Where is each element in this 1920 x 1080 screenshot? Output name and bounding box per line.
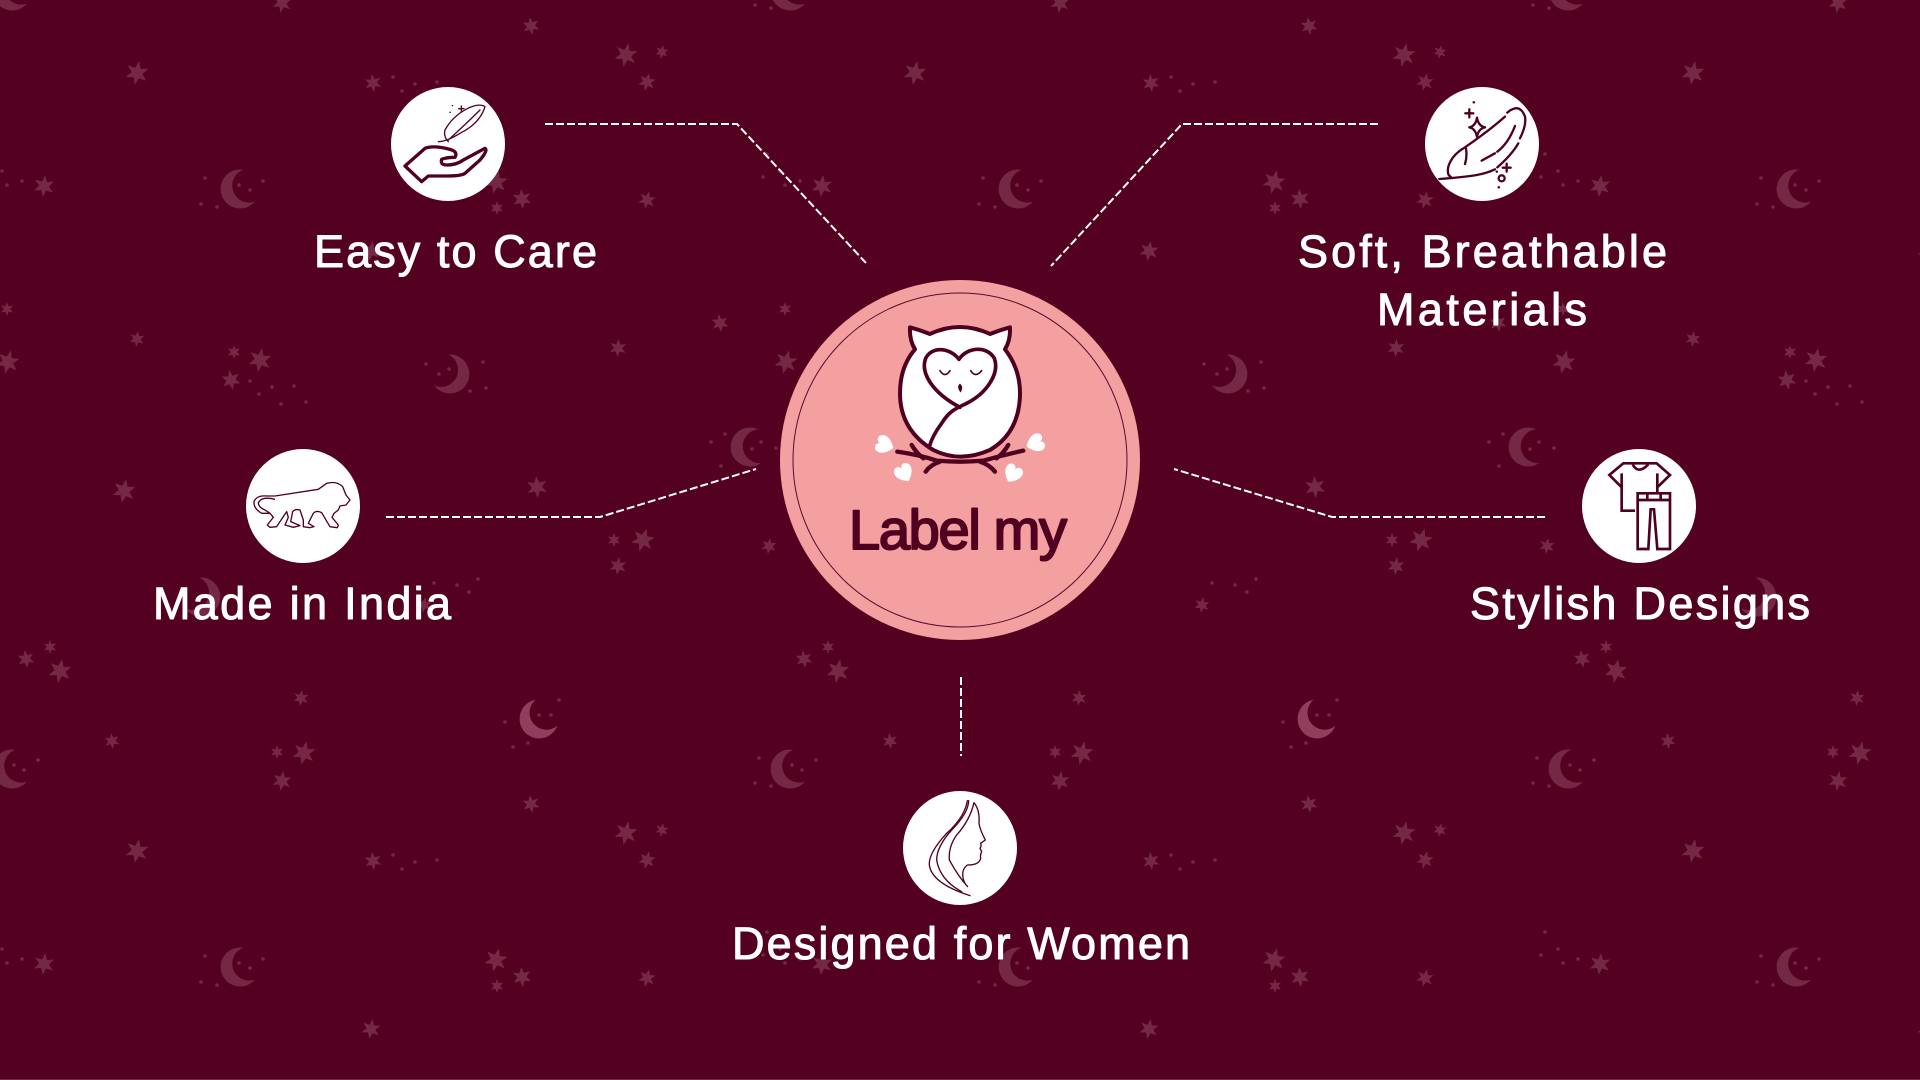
label: Easy to Care [314,226,597,277]
feature: soft breathable materials [1298,87,1667,335]
connector: middle right [1174,469,1545,517]
connector: bottom [960,677,962,756]
owl logo mark [873,327,1046,486]
brand name: Label my [849,498,1067,561]
icon: feather with sparkles [1439,102,1525,187]
label: Made in India [153,578,452,629]
icon: woman profile [929,801,985,896]
connector: top left [545,124,866,263]
label line 2: Materials [1377,284,1587,335]
central logo badge [780,280,1140,640]
feature: made in india [153,449,452,629]
icon: shirt and trousers [1609,463,1670,549]
connector: middle left [386,469,756,517]
feature: easy to care [314,87,597,277]
label: Soft, Breathable [1298,226,1667,277]
icon: hand holding feather [405,105,486,182]
feature: designed for women [732,791,1190,969]
connector: top right [1051,124,1378,266]
feature: stylish designs [1470,449,1810,629]
label: Stylish Designs [1470,578,1810,629]
icon: lion [254,483,350,528]
label: Designed for Women [732,918,1190,969]
